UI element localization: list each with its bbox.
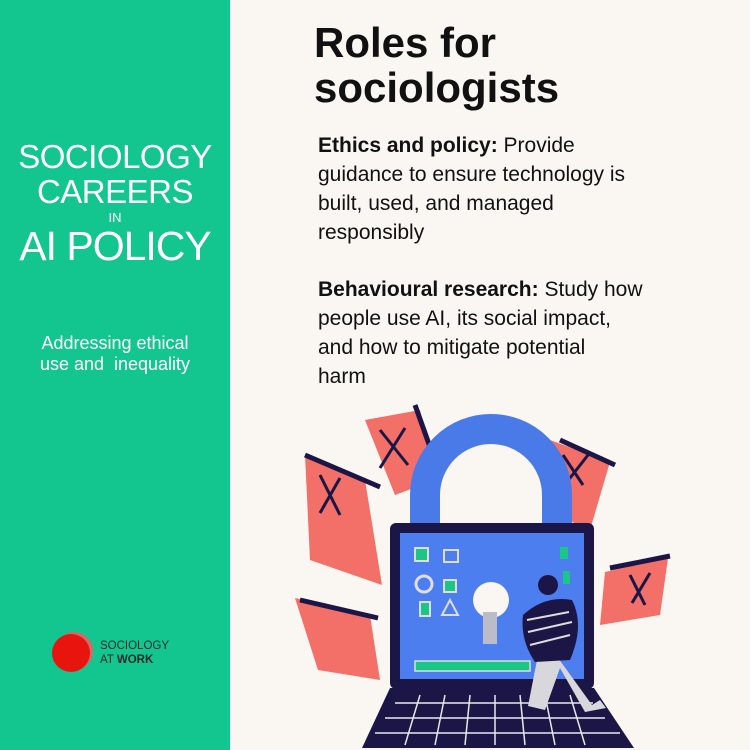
red papers <box>295 405 670 680</box>
subtitle: Addressing ethical <box>41 333 189 353</box>
text block: behavioural: Behavioural research: Study how <box>318 278 643 301</box>
title block: AI POLICY <box>19 223 211 269</box>
text block: ethics: guidance to ensure technology is <box>318 163 625 186</box>
text block: ethics <box>318 134 625 244</box>
text block: ethics: Ethics and policy: Provide <box>318 134 575 157</box>
panel: left green <box>0 0 230 750</box>
text block: ethics: built, used, and managed <box>318 192 554 215</box>
text block: behavioural: people use AI, its social impact, <box>318 307 611 330</box>
logo text: SOCIOLOGY <box>100 640 169 652</box>
text block: ethics: responsibly <box>318 221 424 244</box>
text block: behavioural: and how to mitigate potential <box>318 336 585 359</box>
text block: behavioural <box>318 278 643 388</box>
title block: IN <box>108 210 122 225</box>
logo <box>52 632 169 672</box>
title block: SOCIOLOGY <box>18 138 212 175</box>
subtitle: use and inequality <box>40 354 190 374</box>
subtitle <box>40 333 190 374</box>
heading <box>314 19 559 111</box>
title block <box>18 138 212 269</box>
text block: behavioural: harm <box>318 365 366 388</box>
person <box>522 575 606 712</box>
logo text: AT WORK <box>100 654 153 666</box>
heading: sociologists <box>314 64 559 111</box>
title block: CAREERS <box>37 173 193 210</box>
icon: red circle <box>52 634 90 672</box>
laptop <box>362 523 634 748</box>
lock shackle <box>425 429 557 525</box>
logo text <box>100 640 169 666</box>
heading: Roles for <box>314 19 496 66</box>
